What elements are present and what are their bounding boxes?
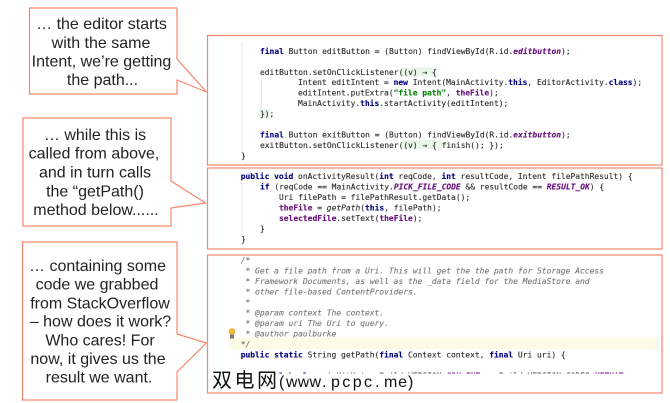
- code: activity result handler: if (reqCode == MainActivity.PICK_FILE_CODE && resultCode == RESULT_OK) {: [260, 182, 604, 192]
- code: button listeners: [241, 47, 642, 160]
- watermark: www: [285, 374, 321, 391]
- code: getPath comment and signature: public static String getPath(final Context context, final Uri uri) {: [241, 350, 566, 360]
- callout: called from above: the “getPath(): [46, 184, 144, 200]
- callout: StackOverflow code: … containing some: [29, 258, 166, 275]
- code: activity result handler: selectedFile.setText(theFile);: [279, 214, 422, 223]
- callout: StackOverflow code: Who cares! For: [45, 332, 155, 350]
- callout: StackOverflow code: now, it gives us the: [30, 351, 166, 368]
- callout: called from above: called from above,: [29, 146, 159, 162]
- callout: editor starts: with the same: [51, 35, 150, 52]
- callout: editor starts: … the editor starts: [36, 16, 167, 33]
- code: getPath comment and signature: *: [246, 298, 250, 307]
- callout: called from above: … while this is: [44, 127, 146, 144]
- watermark: pcpc: [331, 374, 372, 391]
- code: getPath comment and signature: * Get a file path from a Uri. This will get the the path for Storage Access: [246, 266, 604, 276]
- watermark: [212, 364, 413, 393]
- code: button listeners: exitButton.setOnClickListener((v) → { finish(); });: [260, 141, 504, 150]
- code: activity result handler: theFile = getPath(this, filePath);: [279, 204, 442, 212]
- code: button listeners: Intent editIntent = new Intent(MainActivity.this, EditorActivity.class);: [298, 78, 642, 87]
- callout: StackOverflow code: [22, 242, 206, 400]
- callout: StackOverflow code: code we grabbed: [36, 276, 158, 294]
- code: button listeners: final Button exitButton = (Button) findViewById(R.id.exitbutton);: [260, 130, 571, 140]
- code: getPath comment and signature: * @author paulburke: [246, 330, 337, 338]
- callout: called from above: [23, 118, 206, 226]
- code: button listeners: });: [260, 110, 274, 118]
- callout: editor starts: the path...: [67, 72, 138, 89]
- code: getPath comment and signature: * Framework Documents, as well as the _data field for the MediaStore and: [246, 277, 590, 286]
- code: activity result handler: }: [260, 224, 265, 234]
- code: getPath comment and signature: [241, 256, 623, 380]
- callout: called from above: method below......: [33, 202, 159, 219]
- watermark: .: [322, 374, 326, 391]
- callout: StackOverflow code: – how does it work?: [30, 314, 171, 330]
- code: activity result handler: public void onActivityResult(int reqCode, int resultCode, Intent filePathResult) {: [241, 172, 633, 181]
- watermark: 双电网: [212, 364, 280, 393]
- code: getPath comment and signature: /*: [241, 256, 250, 265]
- watermark: (: [279, 374, 285, 391]
- callout: StackOverflow code: from StackOverflow: [30, 296, 170, 312]
- code: button listeners: editIntent.putExtra("file path", theFile);: [298, 88, 499, 98]
- code: activity result handler: [241, 172, 633, 244]
- watermark: ): [408, 374, 413, 391]
- panel: editor button code: [208, 36, 662, 165]
- code: activity result handler: }: [241, 235, 246, 244]
- panel: onActivityResult code: [208, 168, 662, 249]
- callout: editor starts: Intent, we’re getting: [32, 54, 171, 70]
- callout: called from above: and in turn calls: [39, 164, 151, 182]
- watermark: .: [375, 374, 379, 391]
- code: activity result handler: Uri filePath = filePathResult.getData();: [279, 193, 470, 202]
- code: button listeners: }: [241, 152, 246, 160]
- icon: light bulb: [229, 328, 235, 338]
- code: getPath comment and signature: */: [241, 340, 250, 349]
- panel: getPath code: [208, 255, 662, 393]
- code: button listeners: editButton.setOnClickListener((v) → {: [260, 68, 437, 77]
- callout: StackOverflow code: result we want.: [46, 370, 152, 386]
- code: button listeners: MainActivity.this.startActivity(editIntent);: [298, 99, 508, 108]
- code: getPath comment and signature: * @param context The context.: [246, 308, 384, 318]
- code: getPath comment and signature: * @param uri The Uri to query.: [246, 319, 389, 328]
- code: getPath comment and signature: final boolean isKitKat = Build.VERSION.SDK_INT >= Build.VERSION_CODES.KITKAT: [260, 372, 623, 380]
- watermark: me: [384, 374, 407, 391]
- code: button listeners: final Button editButton = (Button) findViewById(R.id.editbutton);: [260, 47, 571, 56]
- code: getPath comment and signature: * other file-based ContentProviders.: [246, 288, 418, 296]
- callout: editor starts: [30, 8, 206, 94]
